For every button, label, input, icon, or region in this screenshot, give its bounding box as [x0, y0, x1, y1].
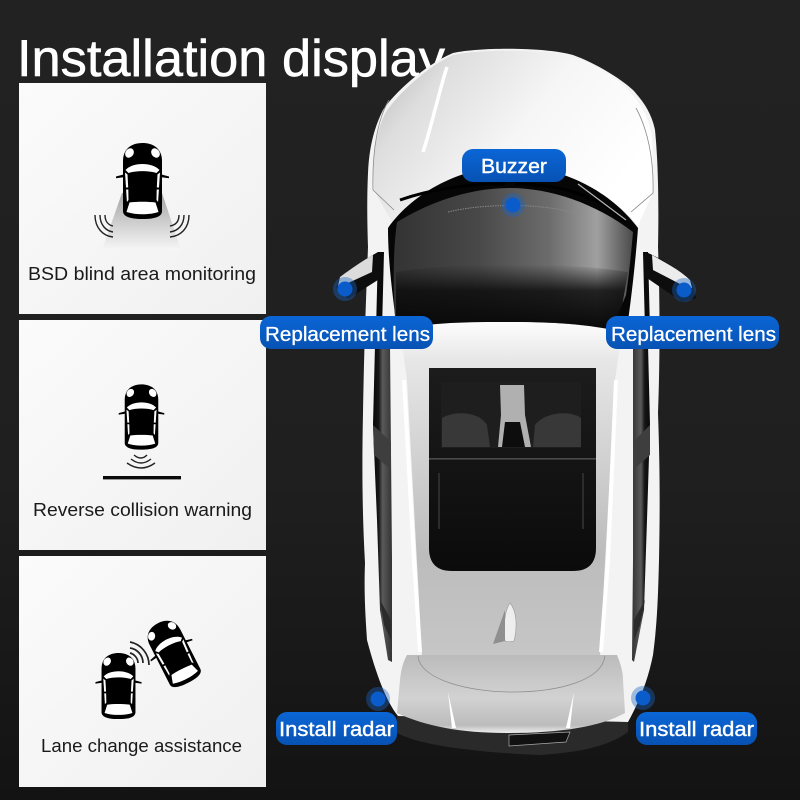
caption: BSD: BSD blind area monitoring [28, 263, 256, 284]
label: Install radar left [276, 712, 397, 745]
car top view [336, 49, 696, 755]
callout dot: left lens [333, 277, 357, 301]
roof rails [404, 380, 420, 652]
callout dot: left radar [366, 687, 390, 711]
caption: reverse: Reverse collision warning [33, 499, 252, 520]
hood [374, 51, 654, 226]
right mirror [644, 252, 696, 302]
panel: BSD blind area monitoring [19, 83, 266, 314]
label: Install radar right [636, 712, 757, 745]
label: Install radar right: Install radar [639, 719, 754, 741]
label: Replacement lens left [260, 316, 433, 349]
panel: lane change assistance [19, 556, 266, 787]
roof [400, 322, 622, 655]
trunk [397, 655, 625, 733]
callout dot: right lens [672, 278, 696, 302]
label: Buzzer [462, 149, 566, 182]
shark fin antenna [504, 603, 516, 642]
label: Buzzer: Buzzer [481, 156, 547, 178]
callout dot: buzzer [501, 193, 525, 217]
label: Replacement lens right [606, 316, 779, 349]
icon: two cars lane change [95, 613, 209, 719]
callout dot: right radar [631, 686, 655, 710]
left side windows [373, 345, 392, 662]
panel: reverse collision warning [19, 320, 266, 550]
rear bumper [397, 690, 628, 755]
caption: lane change: Lane change assistance [41, 735, 242, 756]
title: Installation display [17, 30, 445, 88]
sunroof [429, 368, 596, 571]
label: Replacement lens left: Replacement lens [265, 324, 430, 346]
A-pillar gaps [376, 252, 650, 330]
main body [362, 49, 660, 722]
label: Install radar left: Install radar [279, 719, 394, 741]
label: Replacement lens right: Replacement lens [611, 324, 776, 346]
left mirror [336, 252, 381, 299]
rear wiper [509, 732, 570, 746]
right side windows [632, 345, 650, 662]
icon: car with blind-spot radar [95, 143, 189, 250]
windshield [388, 166, 638, 335]
icon: car reversing to wall [103, 384, 181, 479]
